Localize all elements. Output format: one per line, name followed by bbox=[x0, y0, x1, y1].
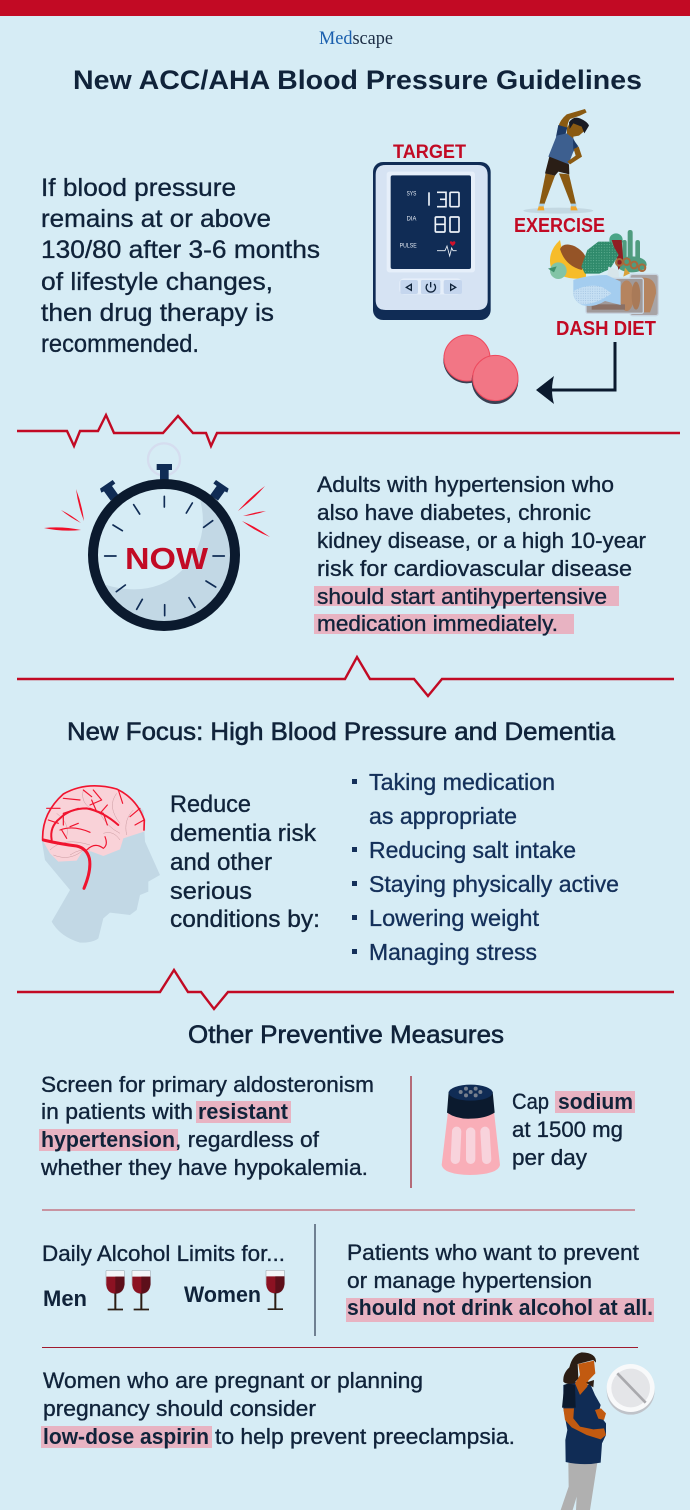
blood pressure monitor: PULSE bbox=[400, 243, 417, 249]
aldosteronism text bbox=[39, 1072, 374, 1180]
pills bbox=[443, 335, 518, 404]
divider one bbox=[17, 415, 680, 446]
reduce dementia text: dementia risk bbox=[170, 820, 317, 847]
alcohol advice text: Patients who want to prevent bbox=[347, 1240, 639, 1265]
reduce dementia text: Reduce bbox=[170, 791, 251, 818]
intro text: then drug therapy is bbox=[41, 299, 274, 327]
reduce dementia text: serious bbox=[170, 878, 252, 905]
sodium cap text: Cap bbox=[512, 1089, 549, 1114]
dash diet foods bbox=[548, 230, 658, 316]
alcohol limits: Men bbox=[43, 1286, 87, 1311]
immediate treatment text: should start antihypertensive bbox=[317, 584, 607, 609]
target label: TARGET bbox=[393, 142, 466, 163]
aldosteronism text: , regardless of bbox=[175, 1127, 320, 1152]
aspirin text: to help prevent preeclampsia. bbox=[215, 1424, 515, 1449]
alcohol limits bbox=[42, 1241, 285, 1311]
blood pressure monitor bbox=[373, 162, 491, 320]
alcohol advice text: should not drink alcohol at all. bbox=[347, 1295, 653, 1320]
dementia bullet list: Lowering weight bbox=[369, 905, 540, 931]
immediate treatment text: kidney disease, or a high 10-year bbox=[317, 528, 646, 553]
dementia bullet list: Taking medication bbox=[369, 769, 555, 795]
pregnant woman with aspirin bbox=[561, 1352, 655, 1510]
dementia bullet list: Reducing salt intake bbox=[369, 837, 576, 863]
blood pressure monitor: DIA bbox=[407, 217, 416, 223]
dash diet label: DASH DIET bbox=[556, 318, 656, 340]
arrow to pills bbox=[536, 342, 615, 404]
aspirin text bbox=[41, 1368, 515, 1449]
intro text: recommended. bbox=[41, 330, 199, 358]
exercise label: EXERCISE bbox=[514, 215, 605, 237]
urgency marks bbox=[44, 486, 270, 537]
intro text: If blood pressure bbox=[41, 174, 236, 202]
dementia bullet list: as appropriate bbox=[369, 803, 517, 829]
immediate treatment text: Adults with hypertension who bbox=[317, 472, 614, 497]
reduce dementia text: conditions by: bbox=[170, 906, 320, 933]
divider two bbox=[17, 657, 674, 696]
brain and head icon bbox=[42, 785, 160, 943]
sodium cap text bbox=[512, 1089, 635, 1170]
blood pressure monitor: SYS bbox=[407, 192, 416, 198]
aldosteronism text: in patients with bbox=[41, 1099, 193, 1124]
intro text bbox=[41, 174, 320, 358]
reduce dementia text bbox=[170, 791, 320, 933]
dementia bullet list: Staying physically active bbox=[369, 871, 619, 897]
sodium cap text: at 1500 mg bbox=[512, 1117, 623, 1142]
alcohol limits: Women bbox=[184, 1282, 261, 1307]
reduce dementia text: and other bbox=[170, 849, 272, 876]
immediate treatment text bbox=[314, 472, 646, 636]
intro text: 130/80 after 3-6 months bbox=[41, 236, 320, 264]
aspirin text: Women who are pregnant or planning bbox=[43, 1368, 423, 1393]
other measures heading: Other Preventive Measures bbox=[188, 1021, 504, 1049]
intro text: of lifestyle changes, bbox=[41, 268, 273, 296]
aldosteronism text: Screen for primary aldosteronism bbox=[41, 1072, 374, 1097]
logo: Medscape bbox=[319, 28, 393, 49]
dementia bullet list: Managing stress bbox=[369, 939, 537, 965]
alcohol advice text: or manage hypertension bbox=[347, 1268, 592, 1293]
dementia bullet list bbox=[352, 769, 619, 965]
salt shaker icon bbox=[442, 1085, 500, 1175]
immediate treatment text: risk for cardiovascular disease bbox=[317, 556, 632, 581]
intro text: remains at or above bbox=[41, 205, 271, 233]
alcohol advice text bbox=[346, 1240, 654, 1322]
aspirin text: pregnancy should consider bbox=[43, 1396, 316, 1421]
dementia heading: New Focus: High Blood Pressure and Dementia bbox=[67, 718, 615, 746]
divider three bbox=[17, 970, 674, 1009]
sodium cap text: sodium bbox=[558, 1089, 633, 1114]
alcohol limits: Daily Alcohol Limits for... bbox=[42, 1241, 285, 1266]
top bar bbox=[0, 0, 690, 16]
title: New ACC/AHA Blood Pressure Guidelines bbox=[73, 65, 642, 95]
aspirin text: low-dose aspirin bbox=[43, 1424, 209, 1449]
aldosteronism text: whether they have hypokalemia. bbox=[40, 1155, 368, 1180]
immediate treatment text: also have diabetes, chronic bbox=[317, 500, 591, 525]
stopwatch bbox=[93, 443, 235, 626]
aldosteronism text: hypertension bbox=[41, 1127, 175, 1152]
wine glasses bbox=[106, 1270, 285, 1310]
sodium cap text: per day bbox=[512, 1145, 587, 1170]
aldosteronism text: resistant bbox=[198, 1099, 289, 1124]
immediate treatment text: medication immediately. bbox=[317, 611, 558, 636]
now label: NOW bbox=[125, 541, 209, 576]
exercise figure bbox=[523, 109, 593, 214]
